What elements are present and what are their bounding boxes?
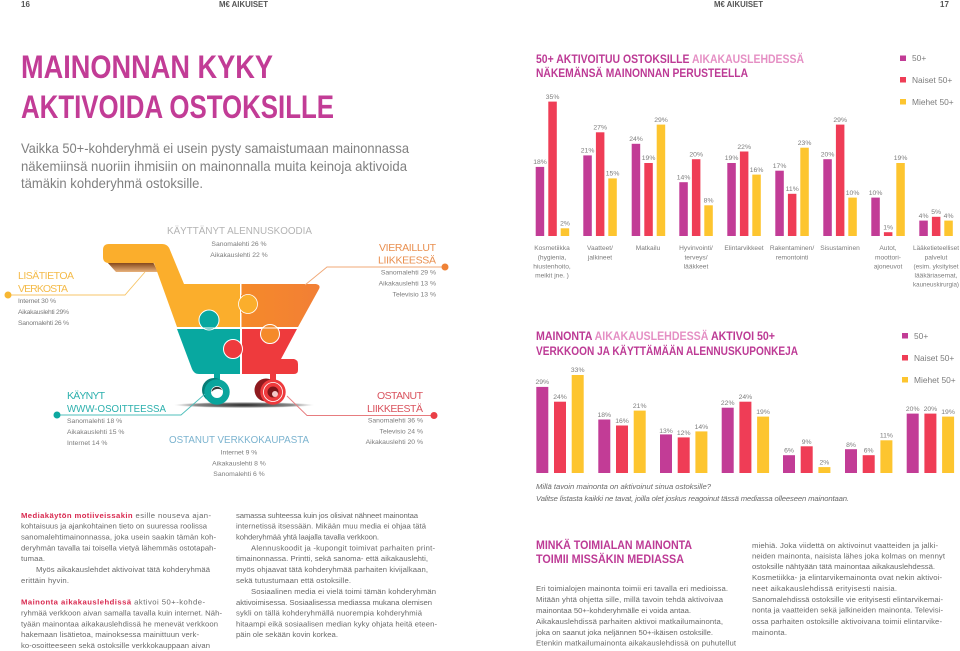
intro text: Vaikka 50+-kohderyhmä ei usein pysty samaistumaan mainonnassa xyxy=(21,140,409,156)
label: ostanut verkkokaupasta: OSTANUT VERKKOKAUPASTA xyxy=(169,434,309,446)
bars: Kosmetiikka: (hygienia, xyxy=(538,254,566,262)
running header: M€ AIKUISET xyxy=(714,0,763,9)
body text column 1: tyään mainontaa aikakauslehdissä he menevät verkkoon xyxy=(21,620,218,628)
bars: Matkailu: Matkailu xyxy=(636,245,661,252)
body text column 1: deryhmän tavalla tai toisella vietyä lähemmäs ostotapah- xyxy=(21,544,216,552)
body text column 2: internetissä itsessään. Mikään muu media ei ohjaa tätä xyxy=(236,522,427,530)
bars: Lääketieteelliset palvelut: lääkäriasemat, xyxy=(915,272,958,280)
chart 2 footnote: Valitse listasta kaikki ne tavat, joilla olet joskus reagoinut tässä mediassa olleeseen mainontaan. xyxy=(536,494,849,503)
bars: Kosmetiikka: hiustenhoito, xyxy=(533,264,571,270)
bar group 2: 16% xyxy=(615,418,629,425)
label: käynyt www-osoitteessa: Aikakauslehti 15 % xyxy=(67,429,124,436)
section text column 2: neiden mainonta, naisista lähes joka kolmas on mennyt xyxy=(752,552,946,560)
body text column 2: myös ohjaavat tätä kohderyhmää parhaiten kivijalkaan, xyxy=(236,565,428,574)
bars: Lääketieteelliset palvelut: 4% xyxy=(919,213,929,220)
bars: Autot xyxy=(869,155,907,270)
running header: M€ AIKUISET xyxy=(219,0,268,9)
label: ostanut liikkeestä: OSTANUT xyxy=(377,390,424,402)
bar group 7: 20% xyxy=(924,406,937,413)
bar chart: activated by magazine advertising, by industry xyxy=(533,94,959,288)
label: vieraillut liikkeessä: VIERAILLUT xyxy=(379,242,437,254)
chart 1 legend xyxy=(900,53,954,107)
title: MAINONNAN KYKY xyxy=(21,49,273,85)
section text column 1: mainontaa 50+-kohderyhmälle ei voida antaa. xyxy=(536,606,691,615)
bars: Rakentaminen xyxy=(770,140,814,262)
bar group 4: 19% xyxy=(756,409,770,416)
label: käynyt www-osoitteessa: KÄYNYT xyxy=(67,390,106,402)
body text column 2: sykli on tällä kohderyhmällä nuorempia kohderyhmiä xyxy=(236,608,423,618)
label: käynyt www-osoitteessa xyxy=(67,390,166,447)
puzzle piece: red xyxy=(242,329,298,374)
label: ostanut verkkokaupasta: Internet 9 % xyxy=(221,450,257,456)
label: käyttänyt alennuskoodia: Sanomalehti 26 % xyxy=(211,241,267,248)
label: käyttänyt alennuskoodia xyxy=(167,225,312,259)
label: käynyt www-osoitteessa: Internet 14 % xyxy=(67,440,107,447)
chart 2 heading xyxy=(536,328,798,358)
bars: Rakentaminen: 11% xyxy=(786,186,799,193)
chart 1 legend: Naiset 50+ xyxy=(912,75,952,85)
bar group 1 xyxy=(535,367,585,473)
bar group 4 xyxy=(721,394,770,473)
bars: Sisustaminen: 20% xyxy=(821,152,834,158)
puzzle piece: orange xyxy=(241,284,320,327)
label: vieraillut liikkeessä xyxy=(378,242,437,298)
bars: Autot: 10% xyxy=(869,190,882,197)
bars: Hyvinvointi: 8% xyxy=(704,198,714,204)
chart 1 heading: 50+ AKTIVOITUU OSTOKSILLE AIKAKAUSLEHDESSÄ xyxy=(536,51,804,66)
bars: Kosmetiikka: 2% xyxy=(560,220,570,228)
bar group 5: 6% xyxy=(784,448,794,454)
bars: Rakentaminen: 23% xyxy=(798,140,811,147)
bar group 3 xyxy=(659,424,708,473)
label: ostanut liikkeestä xyxy=(366,390,424,446)
bars: Vaatteet: 27% xyxy=(593,124,607,132)
bars: Lääketieteelliset palvelut: 5% xyxy=(931,209,941,216)
label: lisätietoa verkosta: Sanomalehti 26 % xyxy=(18,320,69,327)
body text column 2: kohderyhmää yhtä laajalla tavalla verkkoon. xyxy=(236,532,379,542)
bar group 7: 19% xyxy=(941,409,955,416)
body text column 1: sanomalehtimainonnassa, joka usein saakin tämän koh- xyxy=(21,532,216,542)
bars: Lääketieteelliset palvelut: Lääketieteelliset xyxy=(913,245,959,252)
body text column 1: Mediakäytön motiiveissakin esille nouseva ajan- xyxy=(21,511,211,520)
bars: Autot: ajoneuvot xyxy=(874,264,902,270)
bars: Matkailu: 29% xyxy=(654,117,668,124)
bars: Lääketieteelliset palvelut: (esim. yksityiset xyxy=(914,264,959,270)
label: ostanut verkkokaupasta: Aikakauslehti 8 % xyxy=(212,460,266,468)
chart 2 legend: 50+ xyxy=(914,331,928,341)
section text column 2: nonta ja vaatteiden sekä jalkineiden mainonta. Televisi- xyxy=(752,606,943,614)
bar group 6 xyxy=(845,432,893,473)
bar group 5: 9% xyxy=(802,439,812,446)
body text column 1: hakemaan lisätietoa, mainoksessa mainittuun verk- xyxy=(21,630,199,639)
bars: Autot: 1% xyxy=(883,224,893,232)
section text column 2: mainonta. xyxy=(752,628,787,637)
intro text xyxy=(21,140,409,191)
label: ostanut liikkeestä: Televisio 24 % xyxy=(380,428,423,436)
body text column 2 xyxy=(236,511,437,639)
body text column 2: Alennuskoodit ja -kupongit toimivat parhaiten print- xyxy=(251,544,435,552)
bars: Vaatteet: 21% xyxy=(581,148,594,154)
chart 2 legend: Miehet 50+ xyxy=(914,375,956,385)
bars: Elintarvikkeet: 16% xyxy=(750,167,763,174)
body text column 2: hitaampi eikä sosiaalisen median kyky ohjata heitä eteen- xyxy=(236,620,437,628)
bars: Vaatteet: 15% xyxy=(606,170,619,178)
chart 2 footnote: Millä tavoin mainonta on aktivoinut sinua ostoksille? xyxy=(536,482,712,491)
section text column 1: Etenkin matkailumainonta aikakauslehdissä on puhutellut xyxy=(536,638,737,648)
chart 2 heading: MAINONTA AIKAKAUSLEHDESSÄ AKTIVOI 50+ xyxy=(536,328,775,343)
label: käynyt www-osoitteessa: WWW-OSOITTEESSA xyxy=(67,403,166,415)
bars: Elintarvikkeet: 22% xyxy=(737,144,751,151)
label: ostanut liikkeestä: Sanomalehti 36 % xyxy=(368,418,423,424)
chart 1 heading: NÄKEMÄNSÄ MAINONNAN PERUSTEELLA xyxy=(536,65,748,80)
bars: Elintarvikkeet: Elintarvikkeet xyxy=(724,245,764,252)
bars: Matkailu: 19% xyxy=(642,155,655,162)
bars: Kosmetiikka: Kosmetiikka xyxy=(534,245,570,252)
label: käyttänyt alennuskoodia: Aikakauslehti 22 % xyxy=(210,252,268,259)
section text column 2: ossa parhaiten ostoksille aktivoivana toimii elintarvike- xyxy=(752,617,942,626)
leader line: orange xyxy=(305,264,448,285)
running header: 16 xyxy=(21,0,30,9)
bars: Hyvinvointi: 20% xyxy=(689,152,703,158)
label: lisätietoa verkosta xyxy=(18,270,74,327)
running header: 17 xyxy=(940,0,949,9)
leader line: yellow xyxy=(4,272,145,298)
bar group 4: 24% xyxy=(739,394,752,401)
bars: Hyvinvointi: terveys/ xyxy=(684,254,708,262)
bar group 3: 13% xyxy=(659,428,673,435)
bars: Autot: 19% xyxy=(894,155,907,162)
puzzle piece: yellow xyxy=(103,244,240,327)
cart handle underside xyxy=(107,262,158,272)
bar group 2: 18% xyxy=(597,412,611,419)
bar group 4: 22% xyxy=(721,400,735,407)
intro text: tämäkin kohderyhmä ostoksille. xyxy=(21,175,203,191)
label: ostanut liikkeestä: LIIKKEESTÄ xyxy=(367,403,423,415)
bar chart: online and coupon activation xyxy=(535,367,955,473)
section text column 2 xyxy=(752,541,946,637)
chart 2 legend: Naiset 50+ xyxy=(914,353,954,363)
body text column 2: päin ole sekään kovin korkea. xyxy=(236,630,338,639)
bar group 6: 11% xyxy=(880,432,893,440)
label: lisätietoa verkosta: LISÄTIETOA xyxy=(18,270,74,282)
label: vieraillut liikkeessä: LIIKKEESSÄ xyxy=(378,254,436,266)
bars: Kosmetiikka xyxy=(533,94,571,280)
chart 1 legend: 50+ xyxy=(912,53,926,63)
bars: Vaatteet: jalkineet xyxy=(587,254,612,262)
label: lisätietoa verkosta: Internet 30 % xyxy=(18,298,56,305)
section text column 2: Sanomalehdissä ostoksille vie erityisesti elintarvikemai- xyxy=(752,595,943,604)
leader line: teal xyxy=(54,394,205,418)
bars: Rakentaminen: 17% xyxy=(773,163,786,170)
label: ostanut liikkeestä: Aikakauslehti 20 % xyxy=(366,439,423,446)
body text column 1 xyxy=(21,511,222,650)
bars: Sisustaminen: Sisustaminen xyxy=(820,245,860,252)
body text column 1: erittäin hyvin. xyxy=(21,576,69,585)
bars: Kosmetiikka: 18% xyxy=(533,159,547,166)
label: käyttänyt alennuskoodia: KÄYTTÄNYT ALENNUSKOODIA xyxy=(167,225,312,237)
section text column 1: Eri toimialojen mainonta toimii eri tavalla eri medioissa. xyxy=(536,584,728,593)
divider seams xyxy=(177,284,298,374)
bars: Lääketieteelliset palvelut xyxy=(913,209,959,288)
chart 2 legend xyxy=(902,331,956,385)
bars: Hyvinvointi: 14% xyxy=(677,174,690,182)
chart 1 legend: Miehet 50+ xyxy=(912,97,954,107)
body text column 1: tumaa. xyxy=(21,554,45,563)
bars: Sisustaminen: 10% xyxy=(846,190,859,197)
bars: Elintarvikkeet: 19% xyxy=(725,155,738,162)
label: lisätietoa verkosta: VERKOSTA xyxy=(18,283,68,295)
body text column 2: timainonnassa. Printti, sekä sanoma- että aikakauslehti, xyxy=(236,554,428,563)
bars: Vaatteet xyxy=(581,124,619,262)
bar group 5: 2% xyxy=(819,460,829,466)
puzzle piece: teal xyxy=(177,329,240,374)
bar group 1: 29% xyxy=(535,379,549,386)
section text column 2: neet aikakauslehdissä erityisesti naisia. xyxy=(752,584,897,593)
label: ostanut verkkokaupasta xyxy=(169,434,309,478)
leader line: red xyxy=(287,396,438,419)
bars: Kosmetiikka: 35% xyxy=(546,94,559,101)
body text column 2: samassa suhteessa kuin jos olisivat nähneet mainontaa xyxy=(236,511,419,520)
label: vieraillut liikkeessä: Aikakauslehti 13 % xyxy=(379,280,436,288)
wheel: teal xyxy=(202,374,230,405)
body text column 1: kohtaisuus ja ajankohtainen tieto on suuressa roolissa xyxy=(21,522,208,530)
chart 2 heading: VERKKOON JA KÄYTTÄMÄÄN ALENNUSKUPONKEJA xyxy=(536,343,798,358)
bars: Matkailu: 24% xyxy=(629,136,643,143)
title: AKTIVOIDA OSTOKSILLE xyxy=(21,89,334,125)
ground shadow xyxy=(174,402,314,408)
label: käynyt www-osoitteessa: Sanomalehti 18 % xyxy=(67,418,122,425)
bar group 3: 12% xyxy=(677,430,691,437)
body text column 1: ko-osoitteeseen sekä ostoksille verkkokauppaan aivan xyxy=(21,641,210,650)
chart 2 footnote xyxy=(536,482,849,503)
body text column 2: aktivoimisessa. Sosiaalisessa mediassa mukana olemisen xyxy=(236,598,432,607)
running header xyxy=(21,0,949,9)
section heading: minkä toimialan mainonta: MINKÄ TOIMIALAN MAINONTA xyxy=(536,537,692,552)
intro text: näkemiinsä nuoriin ihmisiin on mainonnalla muita keinoja aktivoida xyxy=(21,158,407,174)
bars: Rakentaminen: Rakentaminen/ xyxy=(770,245,814,252)
wheel: red xyxy=(254,374,286,405)
bars: Elintarvikkeet xyxy=(724,144,764,252)
section text column 2: ostoksille nähtyään tätä mainontaa aikakauslehdessä. xyxy=(752,562,935,571)
label: lisätietoa verkosta: Aikakauslehti 29% xyxy=(18,309,69,316)
section text column 1: Aikakauslehdissä parhaiten aktivoi matkailumainonta, xyxy=(536,617,723,626)
bar group 5 xyxy=(783,439,830,473)
title xyxy=(21,49,334,125)
bars: Hyvinvointi: lääkkeet xyxy=(684,264,708,270)
bar group 6: 8% xyxy=(846,442,856,449)
chart 1 heading xyxy=(536,51,804,80)
bar group 2 xyxy=(597,403,647,473)
bars: Matkailu xyxy=(629,117,668,252)
bars: Kosmetiikka: meikit jne. ) xyxy=(535,272,569,280)
section text column 2: Kosmetiikka- ja elintarvikemainonta ovat nekin aktivoi- xyxy=(752,573,942,582)
bars: Vaatteet: Vaatteet/ xyxy=(587,245,613,252)
label: vieraillut liikkeessä: Televisio 13 % xyxy=(393,292,436,298)
body text column 1: Mainonta aikakauslehdissä aktivoi 50+-kohde- xyxy=(21,598,205,606)
shopping cart puzzle graphic xyxy=(103,244,320,408)
bars: Autot: Autot, xyxy=(879,245,897,252)
bar group 7 xyxy=(906,406,955,473)
section heading: minkä toimialan mainonta: TOIMII MISSÄKIN MEDIASSA xyxy=(536,551,684,566)
body text column 1: Myös aikakauslehdet aktivoivat tätä kohderyhmää xyxy=(36,565,211,574)
body text column 2: sekä tutustumaan että ostoksille. xyxy=(236,576,351,585)
section heading: minkä toimialan mainonta xyxy=(536,537,692,566)
bar group 2: 21% xyxy=(633,403,647,410)
bar group 7: 20% xyxy=(906,406,920,413)
bar group 1: 33% xyxy=(571,367,585,374)
bars: Rakentaminen: remontointi xyxy=(776,254,809,262)
bars: Autot: moottori- xyxy=(875,254,901,262)
bars: Lääketieteelliset palvelut: palvelut xyxy=(925,254,948,262)
label: vieraillut liikkeessä: Sanomalehti 29 % xyxy=(381,270,436,276)
bar group 3: 14% xyxy=(695,424,708,431)
bars: Sisustaminen: 29% xyxy=(833,117,847,124)
body text column 1: ryhmää verkkoon aivan samalla tavalla kuin internet. Näh- xyxy=(21,608,222,618)
bar group 1: 24% xyxy=(553,394,567,401)
bars: Hyvinvointi: Hyvinvointi/ xyxy=(679,245,713,252)
bars: Hyvinvointi xyxy=(677,152,714,270)
section text column 1: Mitään yhtä ohjetta sille, millä tavoin tehdä aktivoivaa xyxy=(536,595,724,604)
section text column 1 xyxy=(535,584,737,648)
section text column 1: joka on saanut joka neljännen 50+-ikäisen ostoksille. xyxy=(535,628,713,637)
bar group 6: 6% xyxy=(864,448,874,454)
label: ostanut verkkokaupasta: Sanomalehti 6 % xyxy=(213,471,265,478)
bars: Lääketieteelliset palvelut: 4% xyxy=(944,213,954,220)
section text column 2: miehiä. Joka viidettä on aktivoinut vaatteiden ja jalki- xyxy=(752,541,938,550)
body text column 2: Sosiaalinen media ei vielä toimi tämän kohderyhmän xyxy=(251,587,436,596)
bars: Sisustaminen xyxy=(820,117,860,252)
